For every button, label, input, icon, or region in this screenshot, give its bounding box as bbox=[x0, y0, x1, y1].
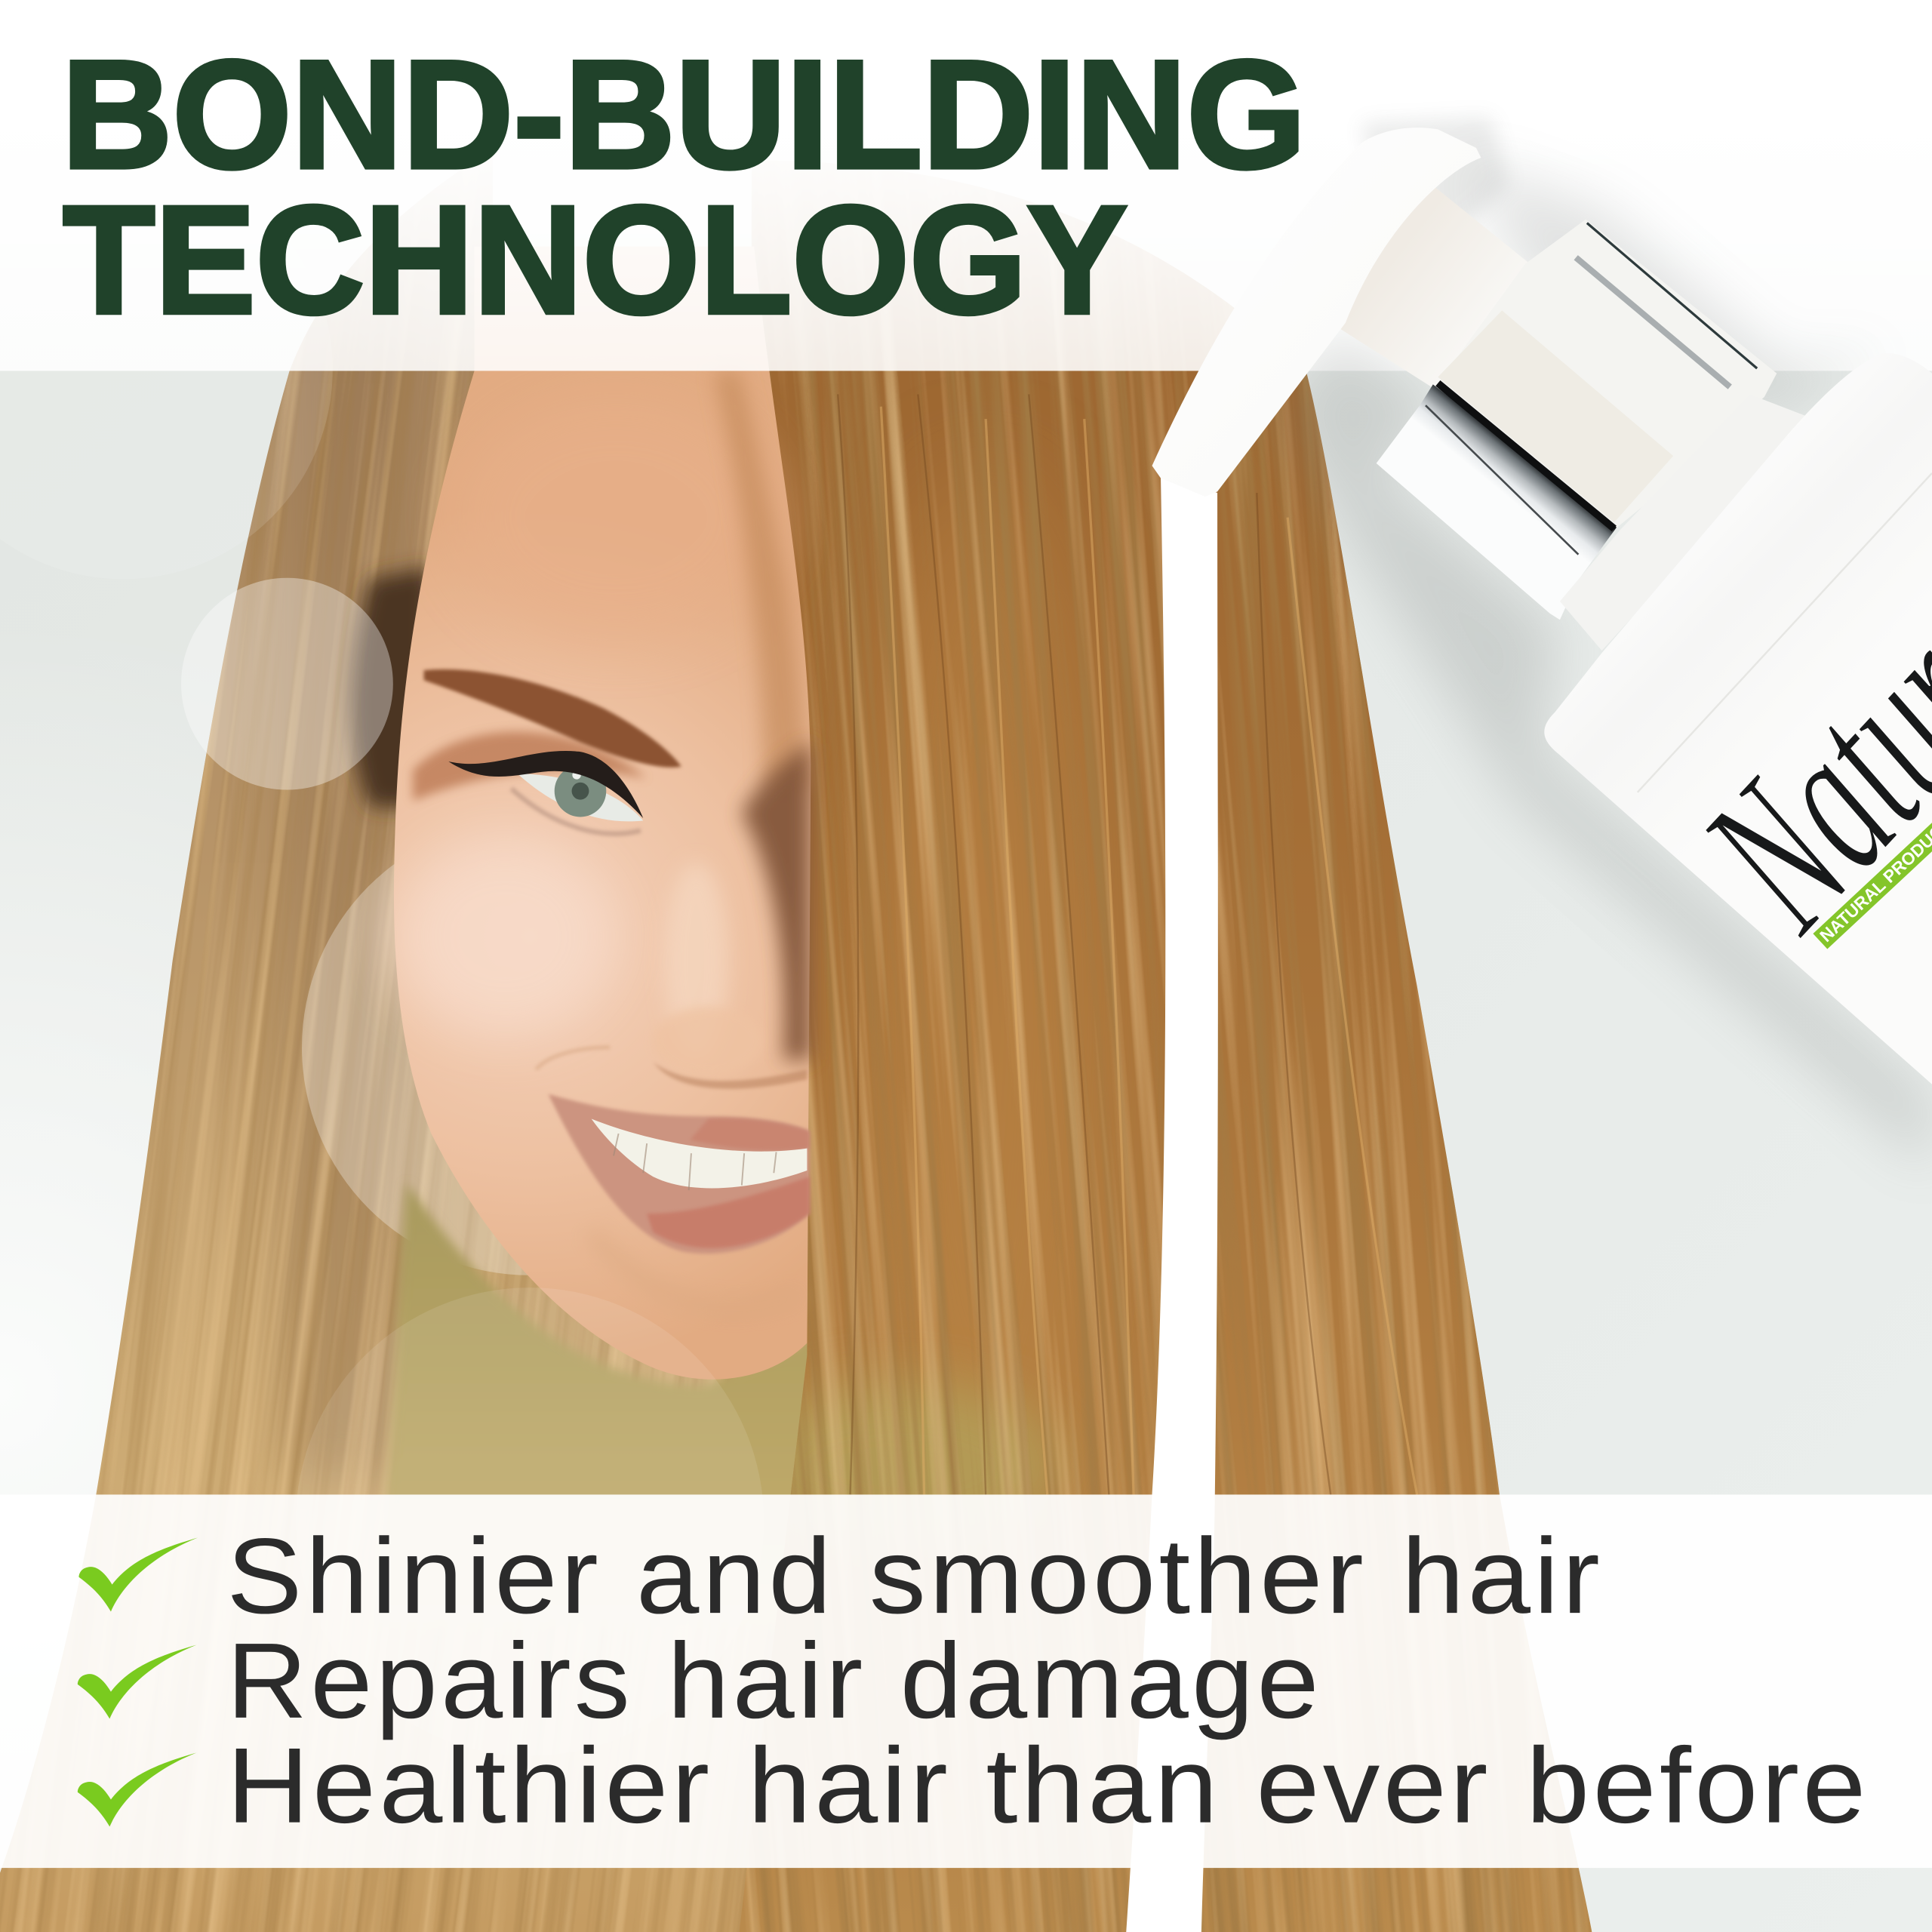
chin shadow bbox=[592, 1232, 801, 1308]
title: TECHNOLOGY bbox=[63, 174, 1128, 346]
benefit 3: Healthier hair than ever before bbox=[226, 1726, 1869, 1846]
product bottle bbox=[1152, 117, 1932, 1171]
chrome highlight bbox=[1576, 257, 1730, 387]
lips bbox=[549, 1094, 810, 1254]
cheek highlight bbox=[394, 838, 616, 1035]
plate soft shadow bbox=[1361, 117, 1509, 234]
pump collar upper bbox=[1439, 220, 1777, 530]
pump head plate bbox=[1152, 128, 1481, 497]
chrome lower bar bbox=[1377, 384, 1617, 620]
smile crease bbox=[536, 1048, 610, 1069]
upper soft shadow bbox=[1466, 160, 1885, 419]
pump stem bbox=[1331, 173, 1533, 392]
photo: woman's right hair bbox=[740, 209, 1592, 1932]
collar cream panel bbox=[1438, 310, 1673, 522]
chrome thin line bbox=[1426, 405, 1578, 555]
benefits checklist bbox=[78, 1516, 1869, 1846]
nose side shadow bbox=[742, 742, 811, 1060]
white serum stream bbox=[1126, 475, 1218, 1932]
eye bbox=[448, 751, 643, 834]
lower lash shadow bbox=[512, 789, 641, 834]
forehead tone bbox=[456, 394, 777, 641]
photo: woman's neck bbox=[370, 1183, 820, 1626]
check icon bbox=[78, 1752, 196, 1826]
large bokeh circle behind face bbox=[302, 820, 758, 1275]
bottle body bbox=[1544, 353, 1932, 1084]
bokeh light circles bbox=[0, 160, 764, 1756]
nostril shadow bbox=[653, 1062, 807, 1089]
photo: woman's face bbox=[394, 247, 811, 1380]
eyebrow bbox=[424, 669, 681, 768]
title bbox=[62, 29, 1306, 346]
forehead edge shadow bbox=[715, 371, 808, 789]
teeth bbox=[592, 1118, 807, 1188]
chrome edge lines bbox=[1587, 223, 1757, 368]
chrome dark line bbox=[1438, 383, 1614, 528]
face base bbox=[394, 247, 811, 1380]
bottle neck bbox=[1560, 394, 1814, 651]
top heading band bbox=[0, 0, 1932, 371]
nose tip bbox=[653, 1007, 764, 1075]
title: BOND-BUILDING bbox=[62, 29, 1306, 201]
nose highlight bbox=[664, 863, 728, 1060]
benefit 2: Repairs hair damage bbox=[226, 1621, 1322, 1741]
eye socket shadow bbox=[413, 732, 647, 801]
label edge bbox=[1638, 473, 1932, 792]
check icon bbox=[78, 1538, 198, 1612]
eyeliner bbox=[448, 751, 643, 818]
check icon bbox=[78, 1645, 196, 1719]
bottom benefits band bbox=[0, 1494, 1932, 1868]
benefit 1: Shinier and smoother hair bbox=[226, 1516, 1603, 1636]
lower bottle shadow bbox=[1281, 333, 1932, 1171]
photo: woman's left hair bbox=[0, 232, 811, 1932]
